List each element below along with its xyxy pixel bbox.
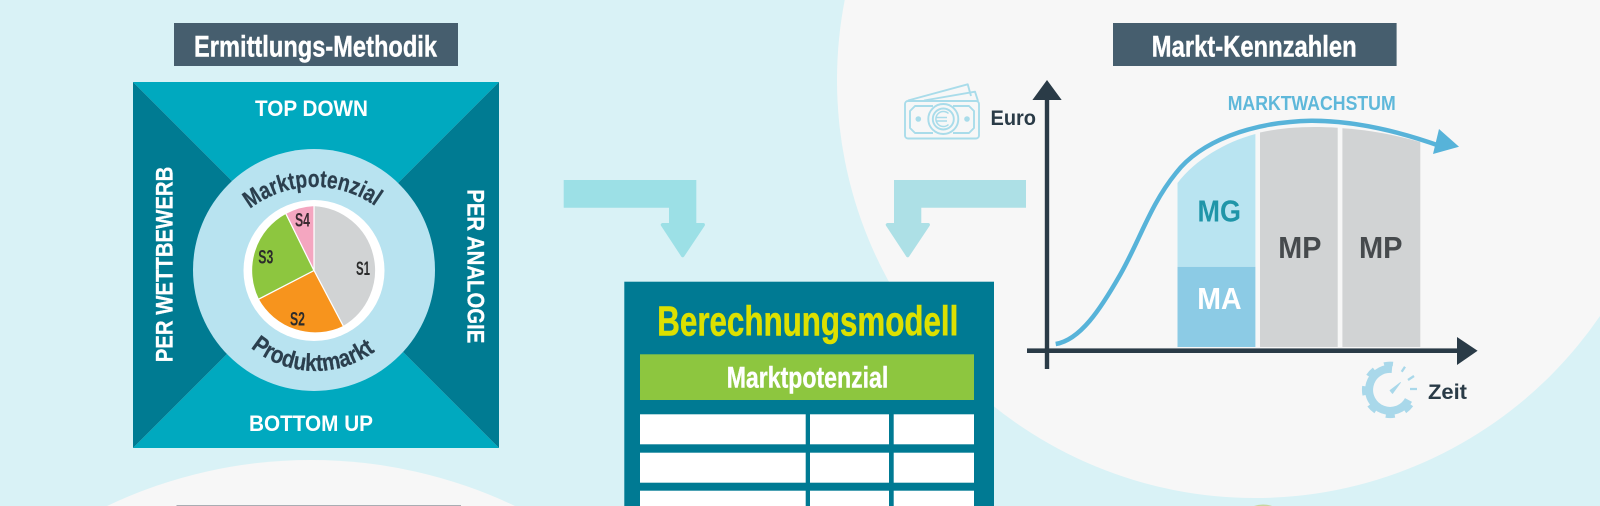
green header bar (640, 354, 974, 400)
lower right element edge (1254, 504, 1272, 506)
label: top down: TOP DOWN (255, 96, 368, 121)
market circle (193, 149, 435, 391)
y axis (1032, 80, 1062, 369)
green header bar: Marktpotenzial (727, 361, 888, 394)
label: per Wettbewerb: PER WETTBEWERB (151, 167, 178, 362)
growth curve (1056, 121, 1440, 344)
pie chart (244, 200, 384, 341)
label S4: S4 (295, 211, 310, 232)
arrow: method to model (564, 180, 703, 256)
label: MP second: MP (1359, 230, 1402, 265)
slice S2 (258, 270, 344, 333)
top segment (133, 82, 499, 265)
heading: Markt-Kennzahlen (1113, 23, 1397, 66)
bar: MA (1178, 267, 1255, 347)
model title: Berechnungsmodell (657, 298, 958, 345)
label: MG: MG (1198, 194, 1241, 229)
heading: Ermittlungs-Methodik: Ermittlungs-Methodik (194, 31, 437, 64)
label S3: S3 (258, 247, 273, 268)
label: MA: MA (1197, 281, 1242, 316)
x axis (1027, 337, 1478, 365)
lower left heading edge (176, 505, 461, 506)
label: bottom up: BOTTOM UP (249, 411, 373, 436)
label: MP first: MP (1278, 230, 1321, 265)
bar: MP second (1342, 128, 1420, 347)
label: Zeit: Zeit (1428, 381, 1467, 404)
label: Euro: Euro (990, 107, 1036, 130)
label: per Analogie: PER ANALOGIE (461, 189, 488, 343)
background circle: lower left (107, 460, 515, 506)
curve arrowhead (1433, 129, 1459, 154)
panel: method square (133, 82, 499, 448)
bar: MG (1178, 134, 1255, 267)
slice S4 (286, 206, 314, 270)
label S1: S1 (356, 259, 370, 280)
curved label: Marktpotenzial: Marktpotenzial (242, 171, 384, 208)
slice S1 (314, 206, 376, 326)
label: Marktwachstum: MARKTWACHSTUM (1228, 93, 1396, 115)
panel: calculation model (624, 282, 994, 506)
right segment (316, 82, 499, 448)
label S2: S2 (290, 310, 305, 331)
heading: Ermittlungs-Methodik (174, 23, 458, 66)
chart: market growth (990, 80, 1478, 404)
icon: banknotes (905, 84, 979, 138)
bar: MP first (1260, 127, 1338, 347)
left segment (133, 82, 316, 448)
arrow: figures to model (888, 180, 1026, 256)
icon: stopwatch gear (1364, 364, 1417, 416)
curved label: Produktmarkt: Produktmarkt (252, 335, 376, 372)
heading: Markt-Kennzahlen: Markt-Kennzahlen (1152, 31, 1357, 64)
background circle: market figures (837, 0, 1600, 498)
bottom segment (133, 265, 499, 448)
table rows (640, 414, 974, 506)
slice S3 (252, 213, 314, 299)
